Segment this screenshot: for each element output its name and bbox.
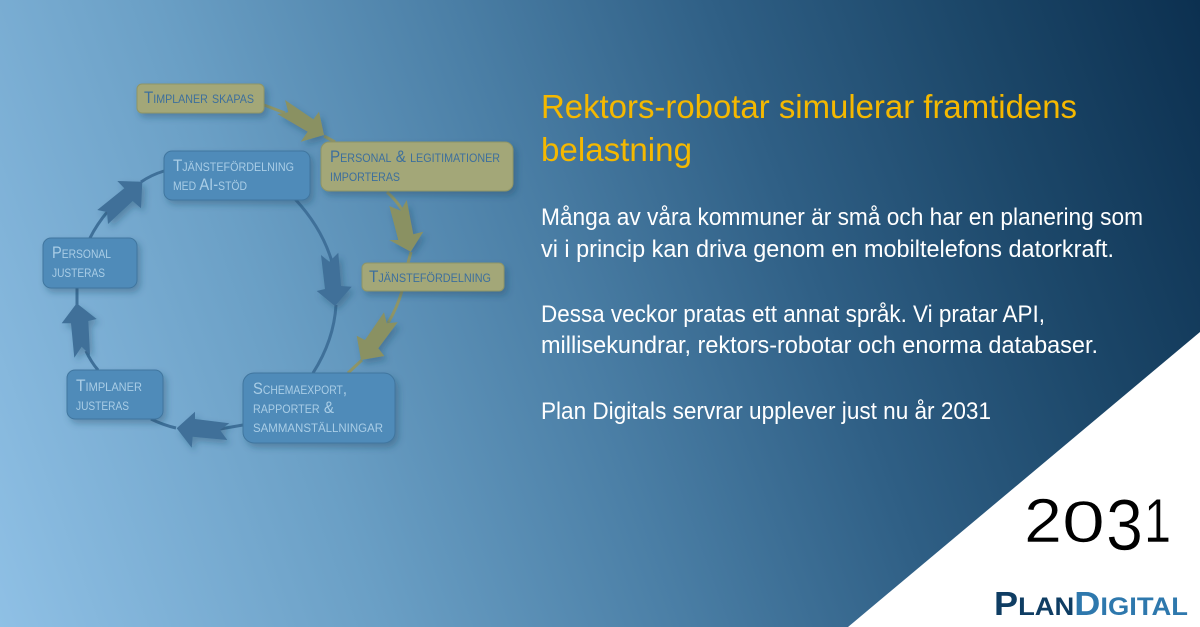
box: Personal & legitimationer importeras: Personal & legitimationer <box>330 147 500 166</box>
paragraph: small municipalities: Många av våra kommuner är små och har en planering som <box>541 204 1143 231</box>
box: Personal justeras: Personal <box>52 243 111 262</box>
arrow: schemaexport to timplaner justeras <box>177 412 229 448</box>
box: Tjänstefördelning: Tjänstefördelning <box>369 267 491 286</box>
box: Schemaexport, rapporter & sammanställningar <box>243 373 395 443</box>
arrow: personal to tjänstefördelning <box>97 181 142 224</box>
box: Personal & legitimationer importeras <box>321 142 513 191</box>
box: Personal justeras: justeras <box>52 262 105 281</box>
year 2031: 0 <box>1062 490 1105 555</box>
heading <box>541 88 1077 168</box>
logo: PlanDigital: PLANDIGITAL <box>994 585 1188 622</box>
cycle diagram <box>43 84 513 448</box>
year 2031: 2 <box>1024 487 1062 556</box>
year 2031: 1 <box>1144 487 1171 556</box>
year 2031: 3 <box>1106 486 1143 566</box>
box: Timplaner skapas: Timplaner skapas <box>144 88 254 107</box>
box: Timplaner justeras: Timplaner <box>76 376 142 395</box>
connector lines: blue cycle <box>77 171 336 429</box>
box: Schemaexport, rapporter & sammanställningar: Schemaexport, <box>253 379 347 398</box>
white corner triangle <box>848 332 1200 627</box>
box: Tjänstefördelning med AI-stöd <box>164 151 310 200</box>
paragraph: small municipalities: vi i princip kan driva genom en mobiltelefons datorkraft. <box>541 236 1114 263</box>
arrow: timplaner justeras to personal justeras <box>62 303 97 358</box>
box: Tjänstefördelning med AI-stöd: Tjänstefördelning <box>173 156 294 175</box>
heading: Rektors-robotar simulerar framtidens <box>541 88 1077 125</box>
arrow: timplaner skapas to personal <box>277 100 324 142</box>
heading: belastning <box>541 131 692 168</box>
box: Personal justeras <box>43 238 137 288</box>
box: Schemaexport, rapporter & sammanställningar: sammanställningar <box>253 417 383 436</box>
connector lines: olive path <box>264 105 411 373</box>
box: Tjänstefördelning <box>362 263 504 291</box>
box: Tjänstefördelning med AI-stöd: med AI-stöd <box>173 175 247 194</box>
box: Timplaner skapas <box>137 84 264 113</box>
arrow: personal importeras to tjänstefördelning <box>389 200 423 252</box>
paragraph: another language: millisekundrar, rektors-robotar och enorma databaser. <box>541 332 1098 359</box>
paragraph: servers in 2031: Plan Digitals servrar upplever just nu år 2031 <box>541 398 991 425</box>
paragraph: another language <box>541 301 1098 359</box>
box: Timplaner justeras: justeras <box>76 395 129 414</box>
box: Personal & legitimationer importeras: importeras <box>330 166 400 185</box>
paragraph: another language: Dessa veckor pratas ett annat språk. Vi pratar API, <box>541 301 1045 328</box>
box: Schemaexport, rapporter & sammanställningar: rapporter & <box>253 398 335 417</box>
arrow: tjänstefördelning to schemaexport (olive) <box>357 312 398 360</box>
box: Timplaner justeras <box>67 370 163 419</box>
paragraph: small municipalities <box>541 204 1143 263</box>
arrow: AI-stöd to schemaexport (blue) <box>317 253 352 306</box>
